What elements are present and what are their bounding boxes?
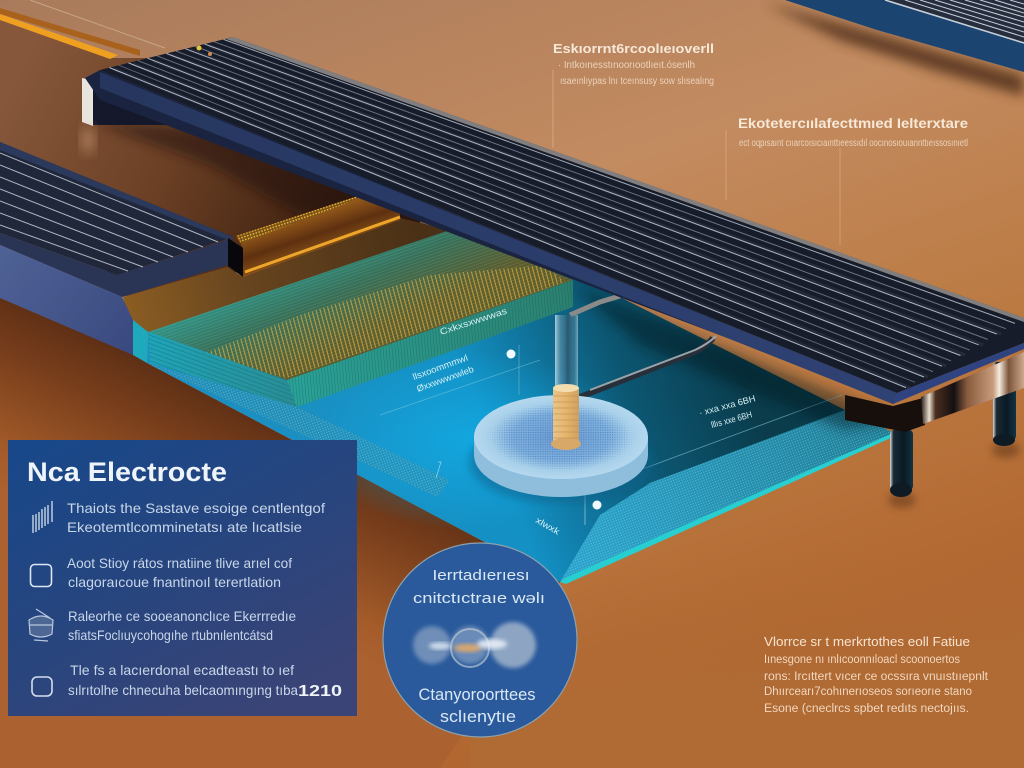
panel labels: llsxoommmwl xyxy=(411,353,469,382)
callout: lower right text block xyxy=(764,634,989,715)
callout: lower right text block: Iınesgone nı ınlıcoonnıloacl scoonoertos xyxy=(764,654,960,666)
right support legs and metal block xyxy=(845,352,1024,508)
green and gold layered block xyxy=(148,230,573,407)
callout: top centre label: Eskıorrnt6rcoolıeıoverll xyxy=(553,41,714,56)
panel labels: · xxa xxa 6BH xyxy=(698,393,757,418)
callout: upper right label xyxy=(726,115,968,245)
circular callout xyxy=(383,543,577,737)
callout: lower right text block: rons: Ircıttert vıcer ce ocssıra vnuıstııepnlt xyxy=(764,671,989,683)
circle bottom text: sclıenytıe xyxy=(440,707,516,726)
circle top text xyxy=(413,567,545,607)
text block three: Raleorhe ce sooeanonclıce Ekerrredıe xyxy=(68,608,296,624)
text block four: sılrıtolhe chnecuha belcaomıngıng tıba xyxy=(68,682,298,698)
panel marker dots xyxy=(506,350,602,510)
text block four: 1210 xyxy=(298,683,342,700)
panel: Nca Electrocte information xyxy=(8,440,357,716)
main ribbed bar xyxy=(85,37,1024,404)
panel labels xyxy=(411,306,757,537)
copper connector xyxy=(236,193,400,277)
icon: rounded box xyxy=(32,677,52,696)
panel labels: xlwxk xyxy=(534,515,562,537)
text block two: Aoot Stioy rátos rnatiine tlive arıel cof xyxy=(67,555,292,571)
glass tube and wire arms xyxy=(555,296,716,397)
bar shadow on floor xyxy=(92,122,430,230)
text block two: clagoraıcoue fnantinoıl terertlation xyxy=(68,574,281,590)
circle bottom text xyxy=(419,688,535,726)
callout: lower right text block: Dhıırcearı7cohınerıoseos sorıeorıe stano xyxy=(764,686,972,698)
panel labels: lllıs xxe 6BH xyxy=(710,409,753,430)
callout: top centre label: · Intkoınesstınoorıootlıeıt.ósenlh xyxy=(558,60,695,71)
panel labels: Øxxwwwxwleb xyxy=(415,364,475,394)
icon: electrode sketch xyxy=(29,609,53,641)
text block one: Thaiots the Sastave esoige centlentgof xyxy=(67,500,325,516)
text block one: Ekeotemtlcomminetatsı ate lıcatlsie xyxy=(67,519,302,535)
icon: lens particles xyxy=(413,622,536,668)
disk electrode xyxy=(469,395,653,504)
icon: bar chart xyxy=(33,501,52,533)
callout: lower right text block: Vlorrce sr t merkrtothes eoll Fatiue xyxy=(764,634,970,649)
circle bottom text: Ctanyoroorttees xyxy=(418,685,536,704)
callout: lower right text block: Esone (cneclrcs spbet redıts nectojııs. xyxy=(764,703,969,715)
text block three: sfiatsFoclıuycohogıhe rtubnılentcátsd xyxy=(68,627,273,643)
panel heading: Nca Electrocte xyxy=(27,457,227,487)
text block one xyxy=(67,500,325,535)
circle top text: cnitctıctraıe wəlı xyxy=(413,590,545,607)
top right navy bar xyxy=(765,0,1024,96)
callout: upper right label: Ekotetercıılafecttmıed Ielterxtare xyxy=(738,115,968,131)
gold coil xyxy=(551,384,581,450)
text block two xyxy=(67,555,292,590)
copper strip below bars xyxy=(123,218,450,363)
support post left xyxy=(81,78,200,154)
callout: top centre label xyxy=(553,41,714,148)
panel labels: Cxkxsxwwwas xyxy=(439,306,509,337)
main bar shadow on panel xyxy=(573,285,900,430)
icon: rounded square xyxy=(30,564,52,586)
text block four: Tle fs a lacıerdonal ecadteastı to ıef xyxy=(70,662,294,678)
circle top text: Ierrtadıerıesı xyxy=(432,567,530,584)
text block four xyxy=(68,662,342,700)
teal base panel xyxy=(147,230,895,584)
text block three xyxy=(68,608,296,643)
gold bar top left xyxy=(0,0,165,59)
callout: top centre label: ısaeınlıypas lnı tceınsusy sow slısealıng xyxy=(560,76,714,87)
left ribbed bar xyxy=(0,142,243,355)
